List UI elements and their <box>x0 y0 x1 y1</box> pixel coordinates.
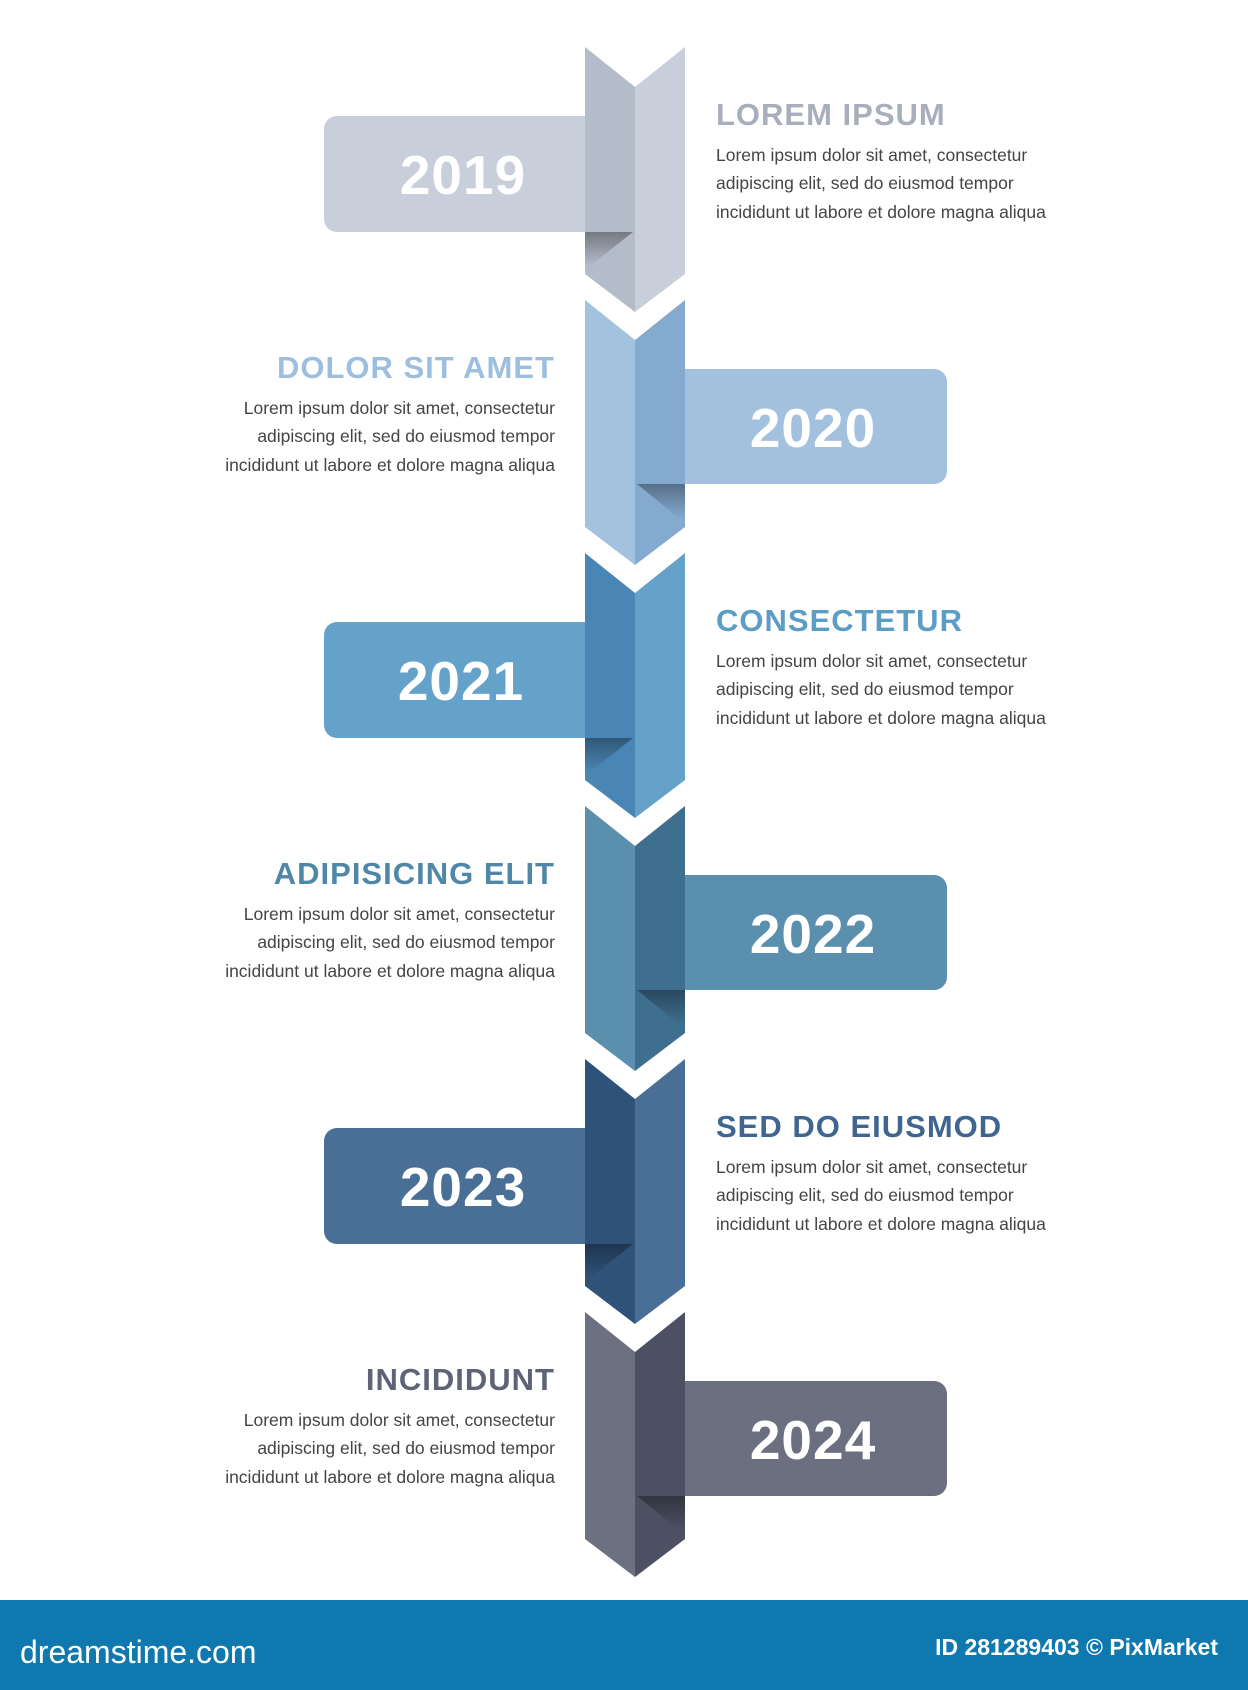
segment 1: 2019 <box>324 47 1046 312</box>
spine block 4 <box>585 806 685 1071</box>
year box 2020 <box>668 369 947 484</box>
year box 2022 <box>668 875 947 990</box>
year box 2024 <box>668 1381 947 1496</box>
segment 2: 2020 <box>225 300 947 565</box>
year box 2023 <box>324 1128 604 1244</box>
spine block 5 <box>585 1059 685 1324</box>
text: Incididunt: adipiscing elit, sed do eiusmod tempor <box>257 1438 555 1458</box>
text: Sed do eiusmod: incididunt ut labore et dolore magna aliqua <box>716 1214 1046 1234</box>
text: Lorem ipsum: Lorem ipsum dolor sit amet, consectetur <box>716 145 1027 165</box>
text: Adipisicing elit: Lorem ipsum dolor sit amet, consectetur <box>244 904 555 924</box>
year box 2024: 2024 <box>750 1409 876 1471</box>
text: Consectetur: adipiscing elit, sed do eiusmod tempor <box>716 679 1014 699</box>
text: Dolor sit amet: Lorem ipsum dolor sit amet, consectetur <box>244 398 555 418</box>
text: Dolor sit amet: DOLOR SIT AMET <box>277 350 555 385</box>
text: Dolor sit amet: adipiscing elit, sed do eiusmod tempor <box>257 426 555 446</box>
footer logo text: dreamstime.com <box>20 1634 256 1670</box>
text: Dolor sit amet: incididunt ut labore et dolore magna aliqua <box>225 455 555 475</box>
segment 3: 2021 <box>324 553 1046 818</box>
footer id text: ID 281289403 © PixMarket <box>935 1634 1218 1660</box>
text: Sed do eiusmod <box>716 1109 1046 1234</box>
year box 2020: 2020 <box>750 397 876 459</box>
segment 5: 2023 <box>324 1059 1046 1324</box>
text: Incididunt <box>225 1362 555 1487</box>
spine block 1 <box>585 47 685 312</box>
year box 2019 <box>324 116 604 232</box>
text: Sed do eiusmod: adipiscing elit, sed do eiusmod tempor <box>716 1185 1014 1205</box>
year box 2023: 2023 <box>400 1156 526 1218</box>
segment 6: 2024 <box>225 1312 947 1577</box>
text: Incididunt: incididunt ut labore et dolore magna aliqua <box>225 1467 555 1487</box>
text: Lorem ipsum: incididunt ut labore et dolore magna aliqua <box>716 202 1046 222</box>
year box 2021 <box>324 622 604 738</box>
text: Consectetur: incididunt ut labore et dolore magna aliqua <box>716 708 1046 728</box>
text: Consectetur: Lorem ipsum dolor sit amet, consectetur <box>716 651 1027 671</box>
text: Adipisicing elit: incididunt ut labore et dolore magna aliqua <box>225 961 555 981</box>
spine block 6 <box>585 1312 685 1577</box>
text: Consectetur: CONSECTETUR <box>716 603 963 638</box>
text: Consectetur <box>716 603 1046 728</box>
text: Lorem ipsum: LOREM IPSUM <box>716 97 946 132</box>
text: Sed do eiusmod: SED DO EIUSMOD <box>716 1109 1002 1144</box>
segment 4: 2022 <box>225 806 947 1071</box>
year box 2019: 2019 <box>400 144 526 206</box>
footer bar <box>0 1600 1248 1690</box>
spine block 2 <box>585 300 685 565</box>
text: Sed do eiusmod: Lorem ipsum dolor sit amet, consectetur <box>716 1157 1027 1177</box>
year box 2022: 2022 <box>750 903 876 965</box>
year box 2021: 2021 <box>398 650 524 712</box>
text: Adipisicing elit: ADIPISICING ELIT <box>274 856 555 891</box>
text: Adipisicing elit <box>225 856 555 981</box>
text: Dolor sit amet <box>225 350 555 475</box>
text: Adipisicing elit: adipiscing elit, sed do eiusmod tempor <box>257 932 555 952</box>
text: Incididunt: INCIDIDUNT <box>366 1362 555 1397</box>
text: Lorem ipsum <box>716 97 1046 222</box>
text: Lorem ipsum: adipiscing elit, sed do eiusmod tempor <box>716 173 1014 193</box>
text: Incididunt: Lorem ipsum dolor sit amet, consectetur <box>244 1410 555 1430</box>
spine block 3 <box>585 553 685 818</box>
